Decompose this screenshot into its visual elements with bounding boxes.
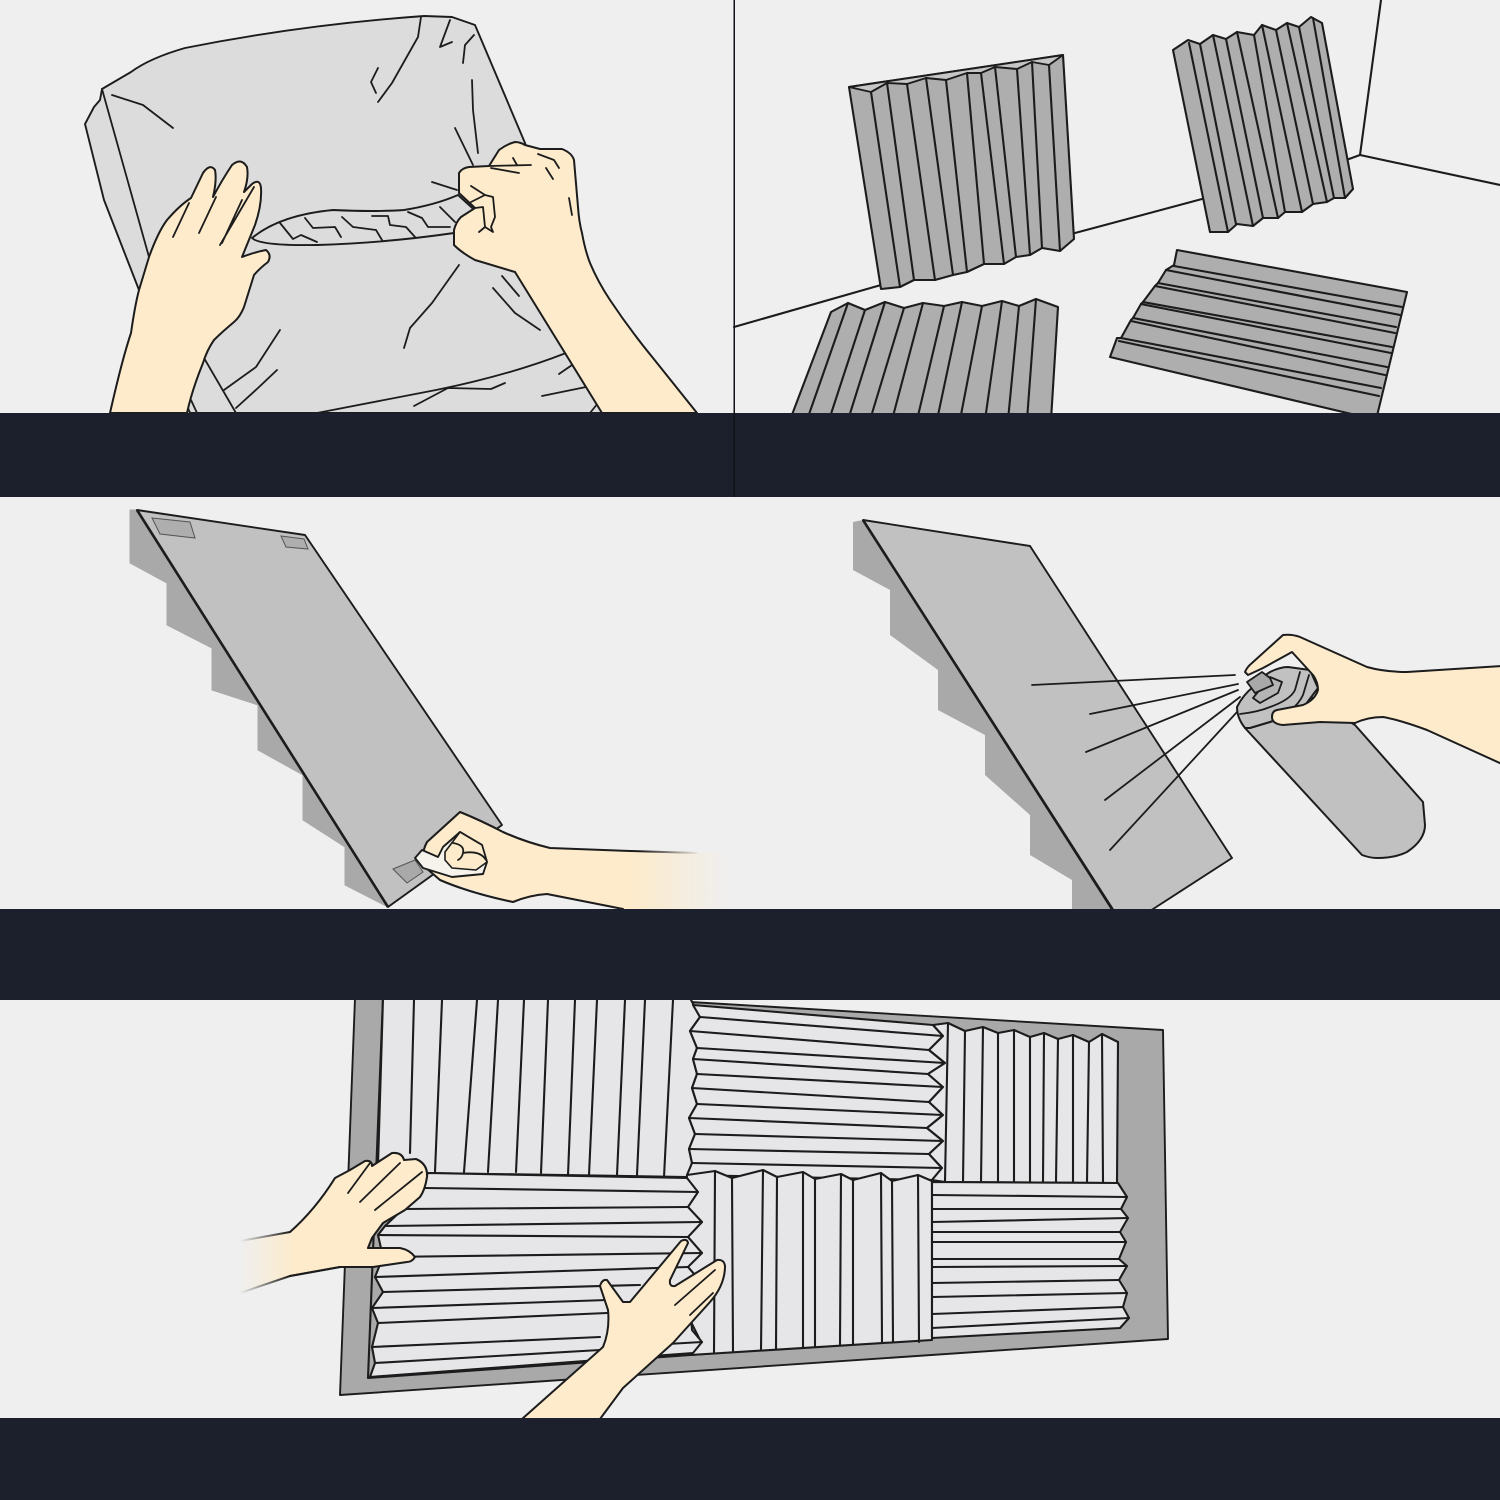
foam panel: top right vertical <box>927 1023 1118 1183</box>
panel: step 4 spray adhesive <box>853 520 1500 911</box>
foam bag <box>85 16 602 413</box>
icon: left hand <box>110 161 270 413</box>
panel: step 2 let foam panels expand <box>734 0 1500 420</box>
wall backing <box>340 998 1168 1395</box>
vertical divider between top panels <box>734 0 735 497</box>
icon: hand pressing tab <box>415 812 730 909</box>
foam panel: upright right <box>1173 17 1353 232</box>
panel: step 1 unpack foam from bag <box>85 16 697 413</box>
foam side steps <box>130 510 388 907</box>
foam panel: upright left <box>849 55 1074 289</box>
foam panel: lower left horizontal <box>370 1173 702 1377</box>
foam panel: lying flat <box>1110 250 1407 416</box>
foam back face <box>137 510 502 907</box>
icon: right hand fist <box>454 142 697 413</box>
icon: left hand on foam <box>240 1153 427 1293</box>
adhesive tab <box>393 860 423 883</box>
stretched bag opening <box>252 195 480 245</box>
foam panel: top left vertical <box>378 998 700 1177</box>
spray lines <box>1032 675 1240 850</box>
room corner lines <box>734 0 1500 327</box>
panel: step 3 apply adhesive tabs <box>130 510 730 909</box>
inner recess line <box>368 998 760 1378</box>
dark caption band: row 1 <box>0 413 1500 497</box>
foam panel: lower centre vertical <box>680 1170 932 1355</box>
icon: hand holding can <box>1245 635 1500 764</box>
spray can <box>1237 667 1425 858</box>
foam side steps <box>853 520 1112 909</box>
panel: step 5 finished wall of foam panels <box>240 998 1168 1419</box>
foam panel: lower left <box>790 299 1058 420</box>
dark caption band: row 3 <box>0 1418 1500 1500</box>
foam back face <box>863 520 1232 911</box>
dark caption band: row 2 <box>0 909 1500 1000</box>
foam panel: lower right horizontal <box>932 1182 1129 1338</box>
icon: right hand on foam <box>522 1240 725 1419</box>
foam panel: top centre horizontal <box>687 1005 945 1180</box>
